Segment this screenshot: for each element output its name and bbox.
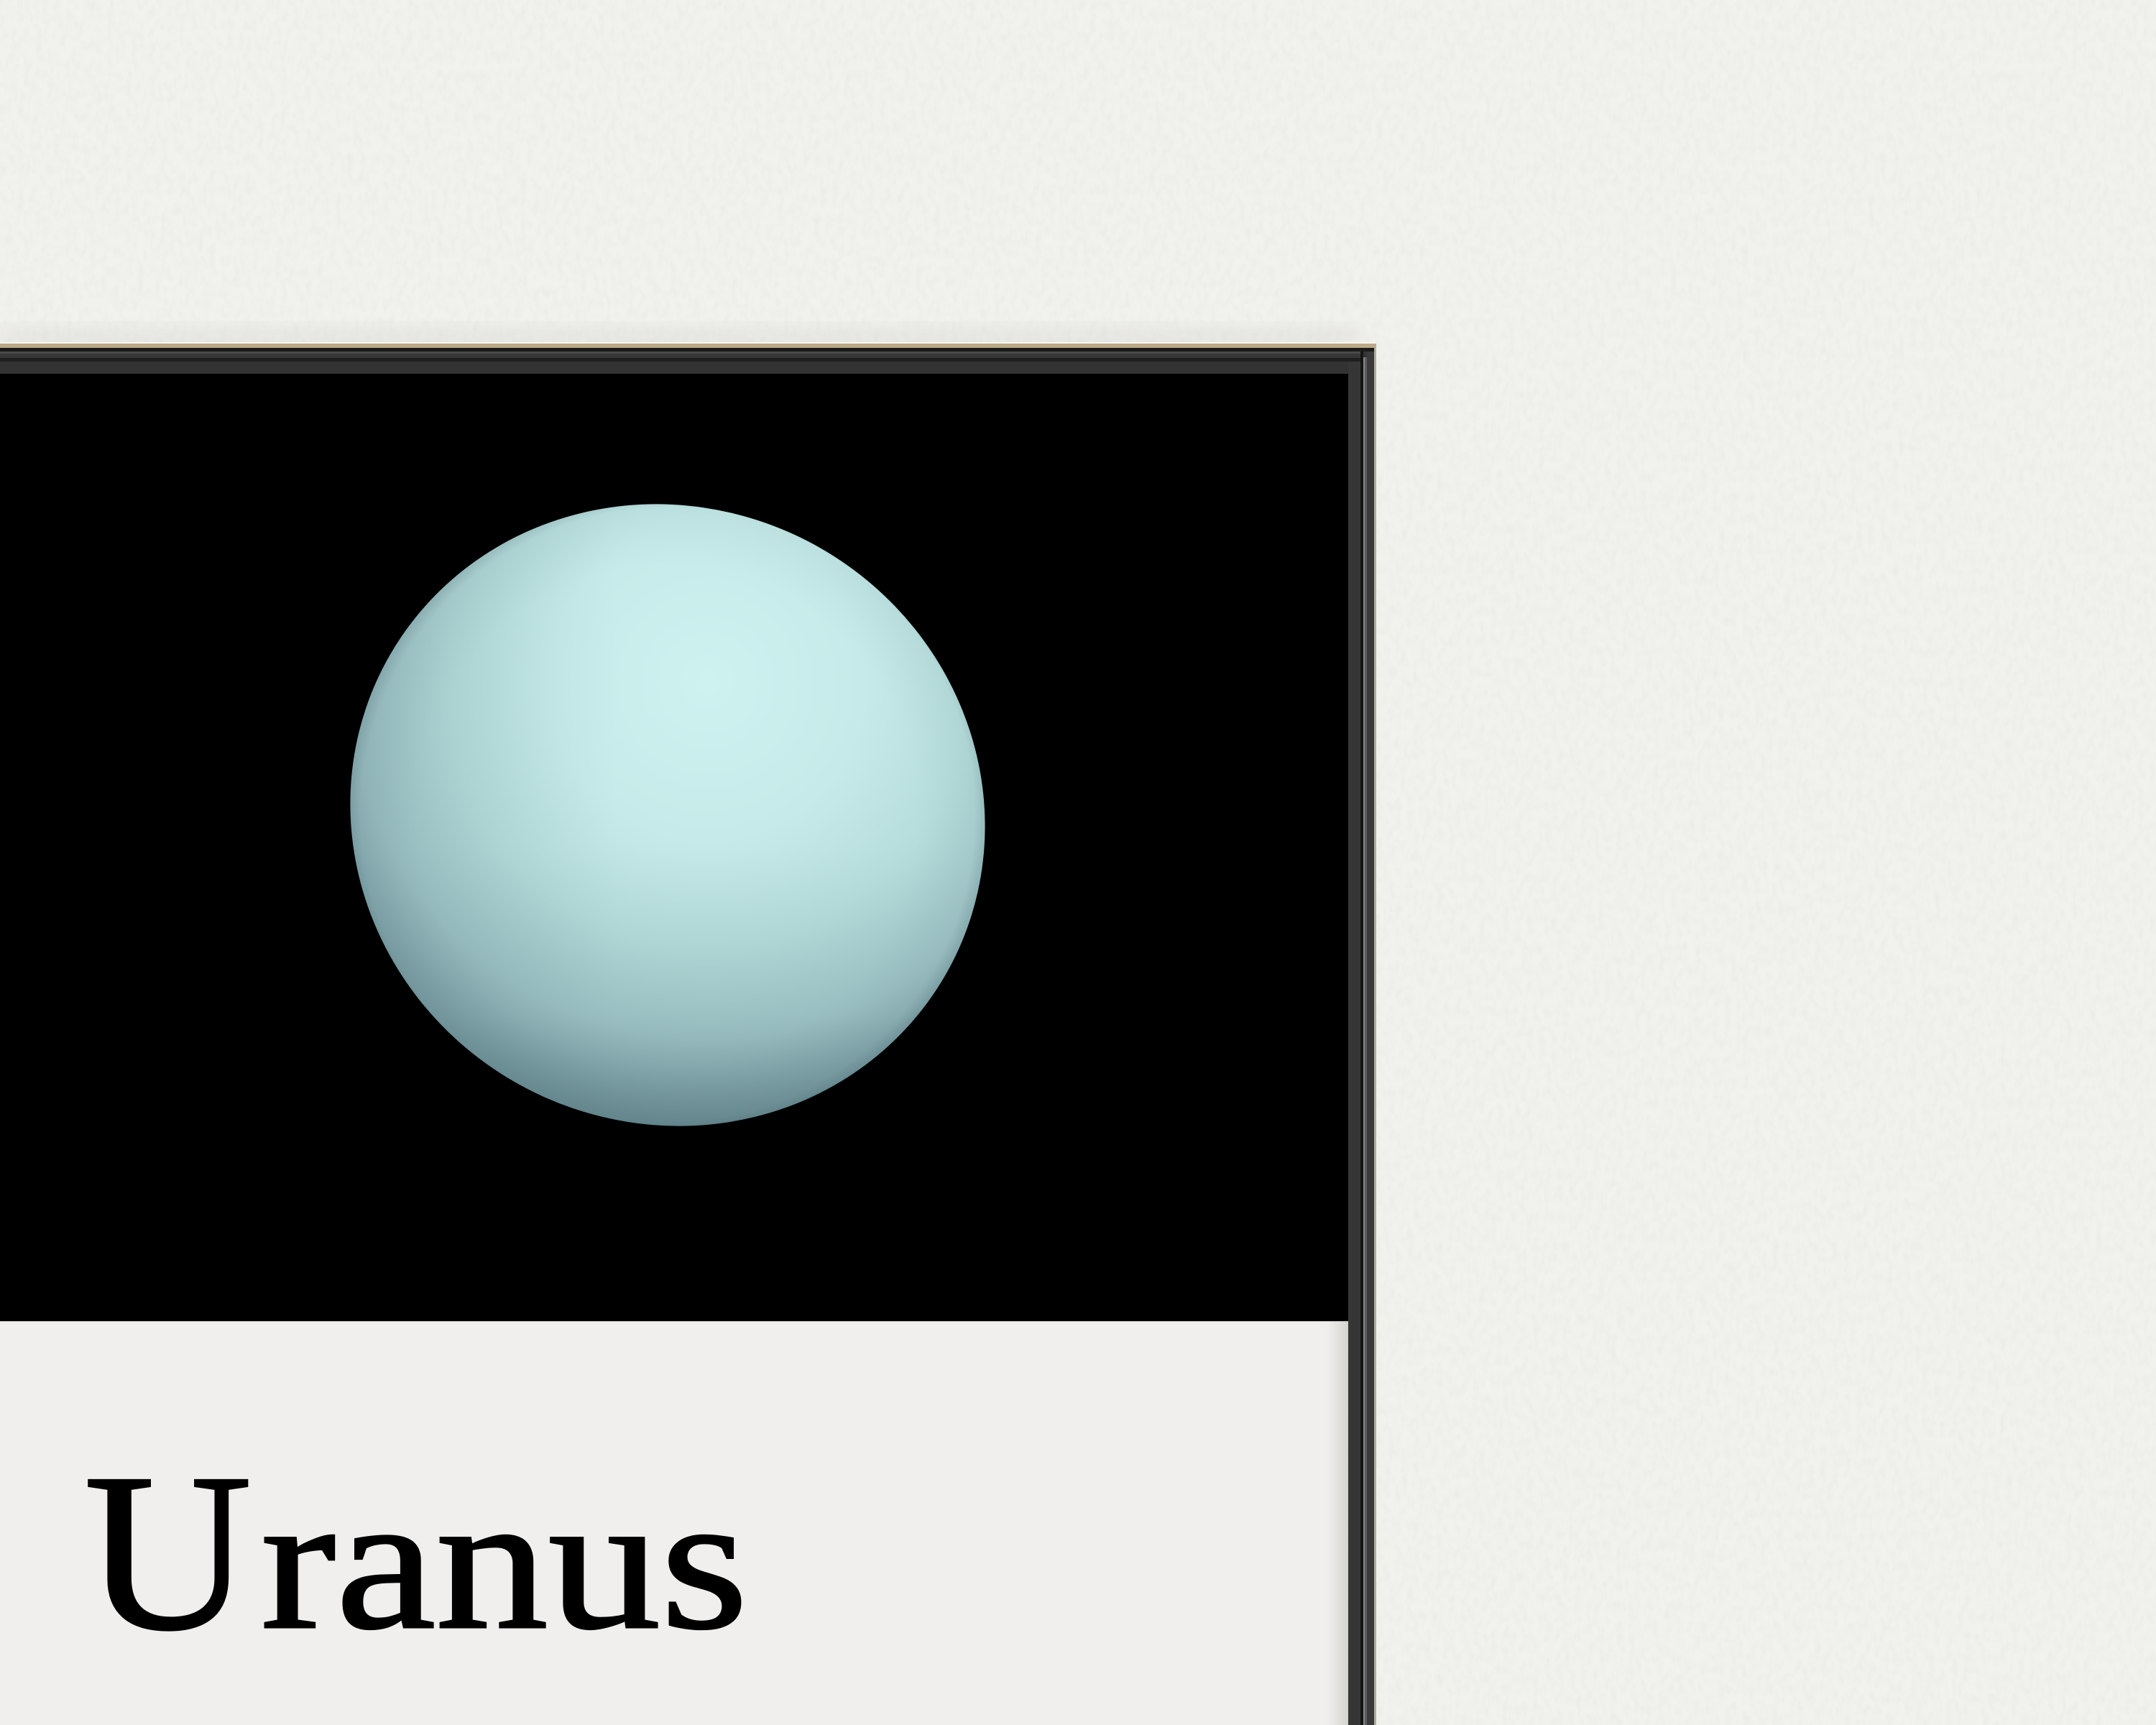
picture frame — [0, 342, 1376, 1725]
black artwork panel — [0, 374, 1348, 1321]
title — [84, 1426, 748, 1676]
shadow above frame — [0, 332, 1358, 344]
title: U — [84, 1426, 252, 1676]
white caption panel — [0, 1321, 1348, 1725]
title: ranus — [261, 1453, 748, 1669]
planet Uranus — [236, 388, 1099, 1242]
